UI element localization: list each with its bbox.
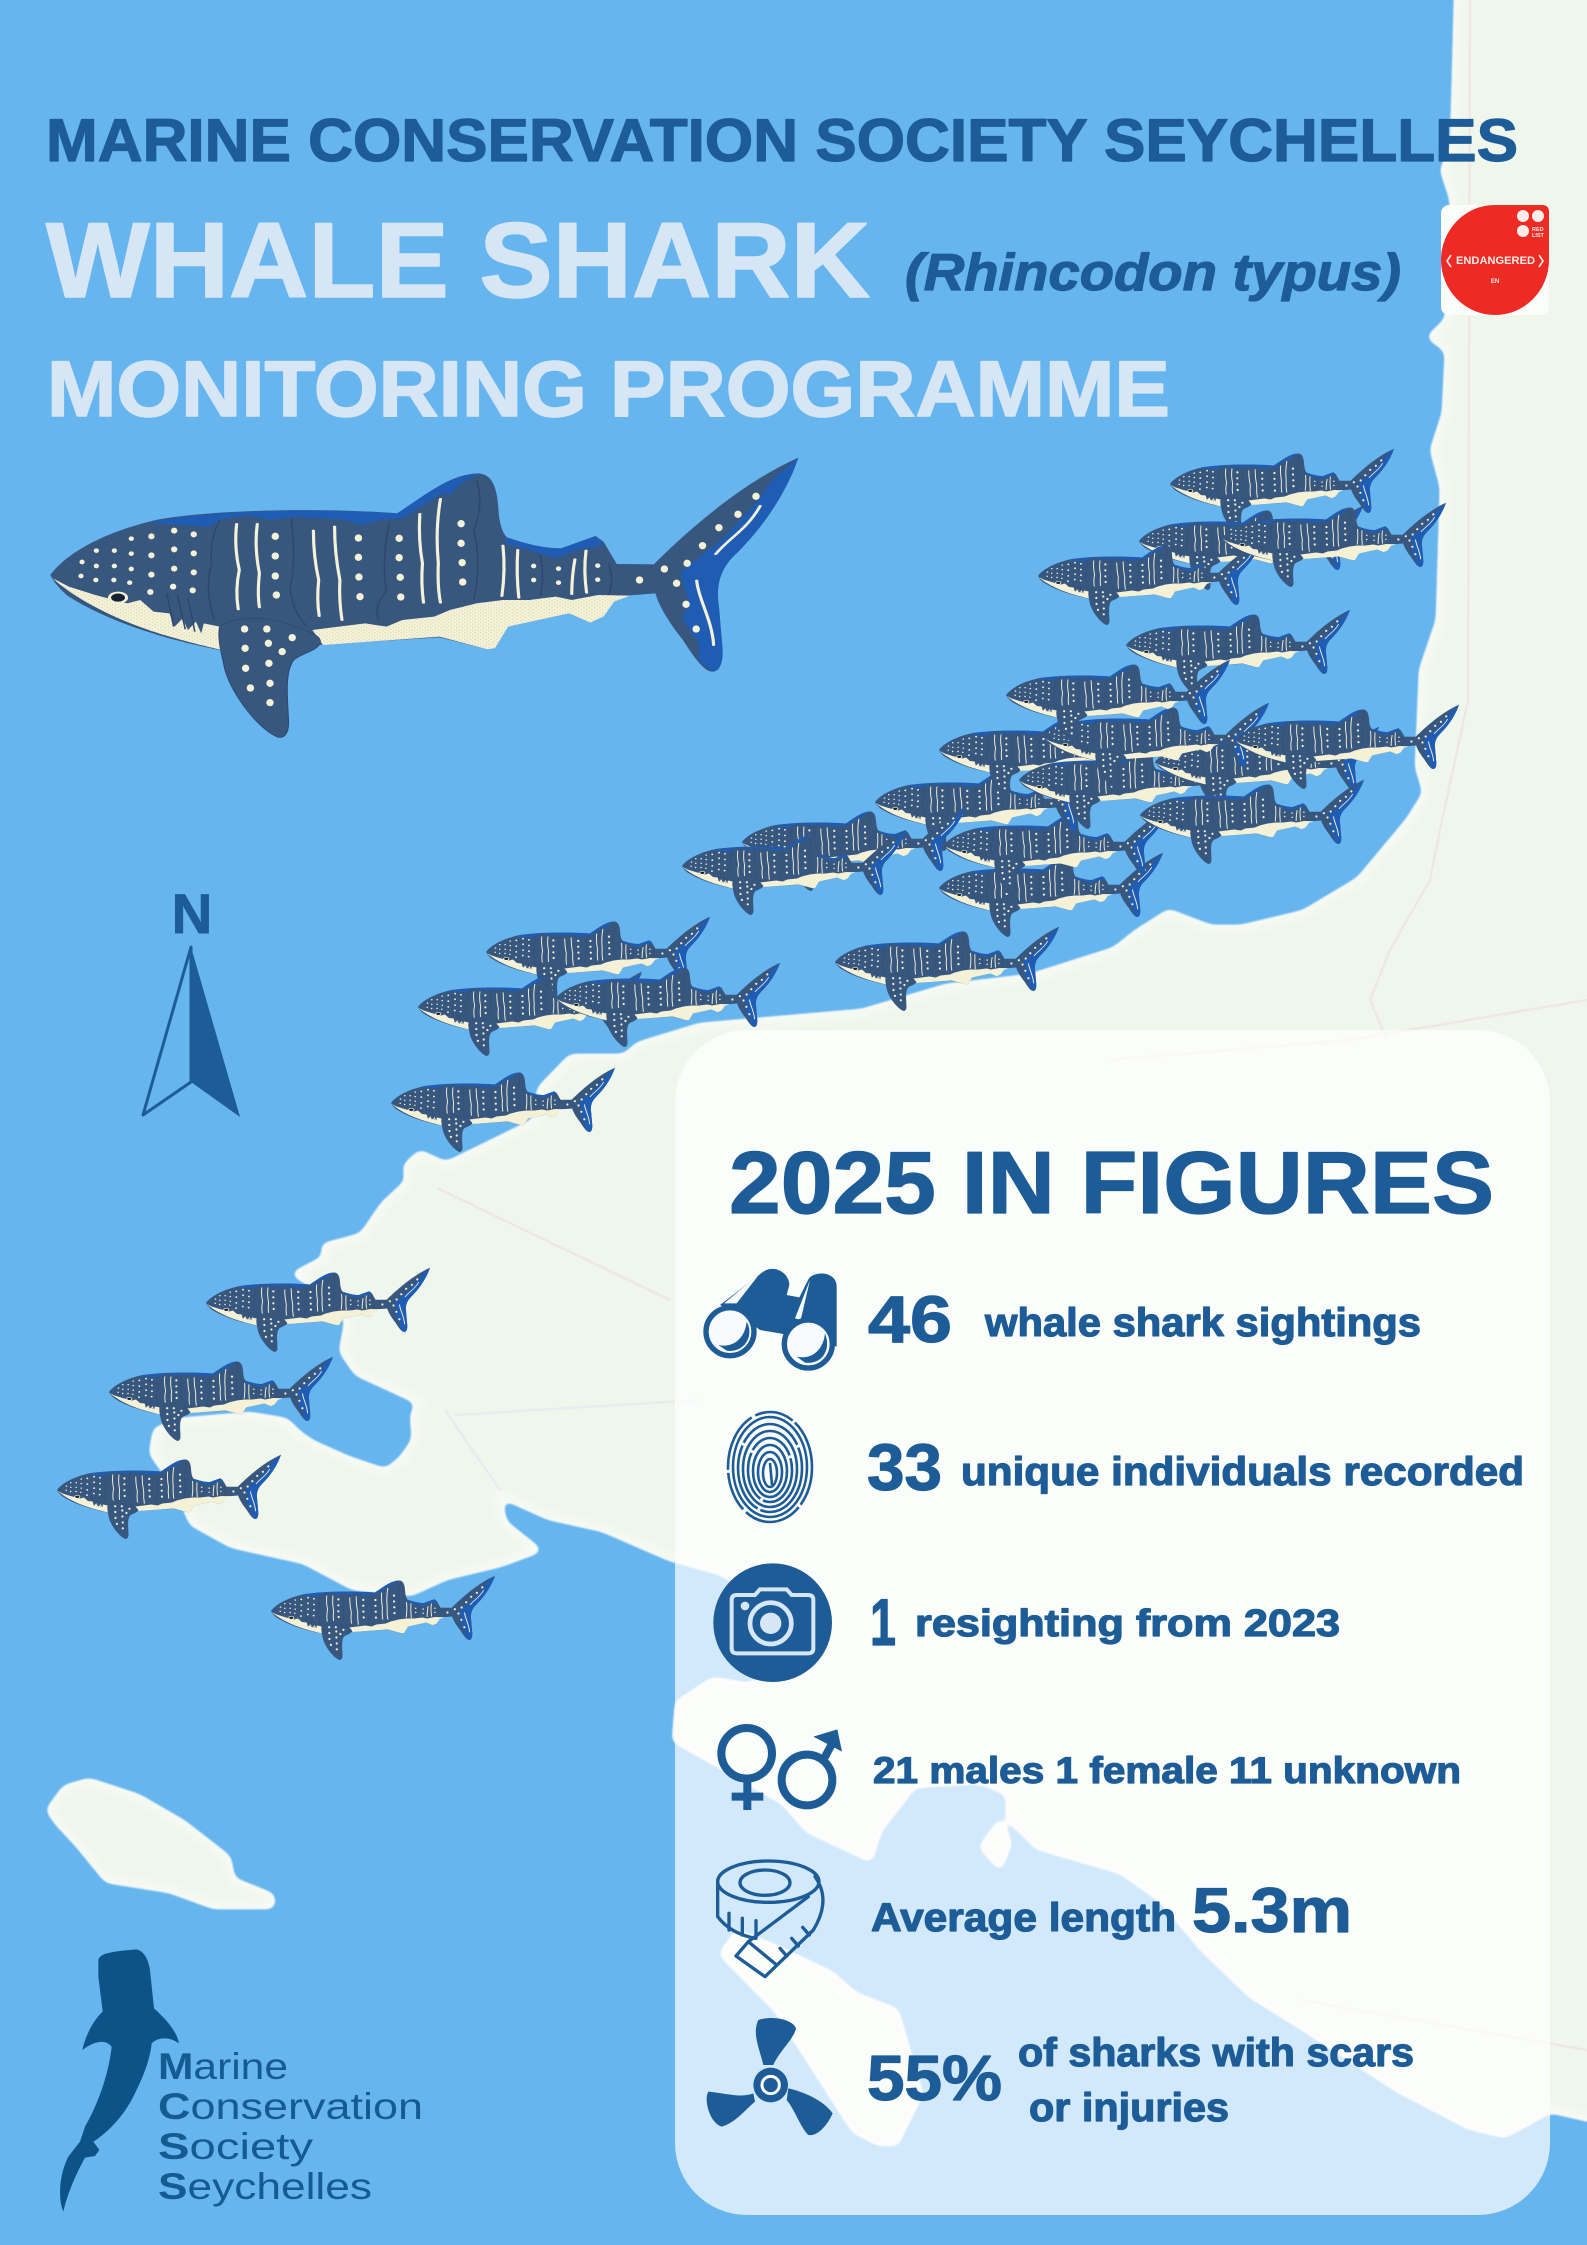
- shark: [1235, 705, 1459, 789]
- shark: [556, 963, 780, 1047]
- school of small whale sharks: [57, 449, 1459, 1660]
- shark: [835, 927, 1059, 1011]
- shark: [1038, 541, 1262, 625]
- logo shark silhouette: [60, 1949, 179, 2212]
- north arrow: [143, 882, 240, 1117]
- text: sex ratio: 21 males 1 female 11 unknown: [873, 1750, 1461, 1791]
- shark: [1139, 506, 1363, 590]
- shark: [109, 1357, 333, 1441]
- icon: binoculars: [706, 1269, 837, 1368]
- title: scientific name: (Rhincodon typus): [905, 244, 1401, 302]
- shark: [418, 972, 642, 1056]
- text: unique individuals recorded: unique individuals recorded: [961, 1450, 1524, 1494]
- map: small islet: [982, 1822, 1009, 1867]
- figure: 55%: 55%: [867, 2042, 1002, 2114]
- shark: [486, 917, 710, 1001]
- IUCN red list badge: EN: [1491, 279, 1499, 285]
- icon: boat propeller: [707, 2018, 833, 2135]
- IUCN red list badge: LIST: [1532, 233, 1545, 239]
- figure: 1: 1: [870, 1585, 896, 1659]
- shark: [1222, 503, 1446, 587]
- logo text: Seychelles: [158, 2166, 372, 2207]
- panel: 2025 in figures: [675, 1030, 1550, 2215]
- IUCN red list badge: [1441, 205, 1549, 315]
- IUCN red list badge: RED: [1532, 227, 1544, 233]
- map: southern peninsula: [722, 1933, 920, 2143]
- logo text: Marine: [158, 2046, 288, 2087]
- shark: [682, 831, 906, 915]
- shark: [1019, 745, 1243, 829]
- shark: [271, 1576, 495, 1660]
- logo text: [158, 2046, 423, 2207]
- text: whale shark sightings: whale shark sightings: [984, 1301, 1421, 1345]
- icon: fingerprint: [728, 1412, 812, 1522]
- shark: [1140, 780, 1364, 864]
- shark: [1045, 703, 1269, 787]
- title: organisation name: MARINE CONSERVATION SOCIETY SEYCHELLES: [46, 107, 1518, 174]
- shark: [1170, 449, 1394, 533]
- figure: 46: 46: [868, 1282, 952, 1356]
- shark: [391, 1068, 615, 1152]
- logo text: Conservation: [158, 2086, 423, 2127]
- shark: [1155, 727, 1379, 811]
- title: monitoring programme: MONITORING PROGRAMME: [47, 344, 1170, 433]
- text: scars line 1: of sharks with scars: [1018, 2031, 1414, 2075]
- shark: [206, 1268, 430, 1352]
- large whale shark illustration: [50, 458, 798, 737]
- logo: marine conservation society seychelles: [60, 1949, 423, 2212]
- icon: camera: [713, 1563, 832, 1682]
- figure: 5.3m: 5.3m: [1192, 1876, 1352, 1946]
- logo text: Society: [158, 2126, 314, 2167]
- title: whale shark: WHALE SHARK: [46, 200, 870, 320]
- text: average length: Average length: [871, 1896, 1176, 1940]
- heading: 2025 in figures: 2025 IN FIGURES: [729, 1133, 1494, 1232]
- shark: [1006, 660, 1230, 744]
- figure: 33: 33: [867, 1430, 942, 1504]
- shark: [742, 807, 966, 891]
- shark: [875, 767, 1099, 851]
- map: south-west island: [49, 1781, 272, 1906]
- IUCN red list badge: ENDANGERED: [1456, 255, 1535, 267]
- shark: [944, 810, 1168, 894]
- shark: [939, 853, 1163, 937]
- north arrow: N: [172, 882, 212, 945]
- shark: [57, 1455, 281, 1539]
- text: scars line 2: or injuries: [1029, 2086, 1229, 2130]
- shark: [939, 715, 1163, 799]
- text: resighting from 2023: resighting from 2023: [915, 1603, 1340, 1645]
- icon: female and male symbols: [721, 1728, 842, 1810]
- shark: [1126, 610, 1350, 694]
- icon: measuring tape: [718, 1861, 823, 1977]
